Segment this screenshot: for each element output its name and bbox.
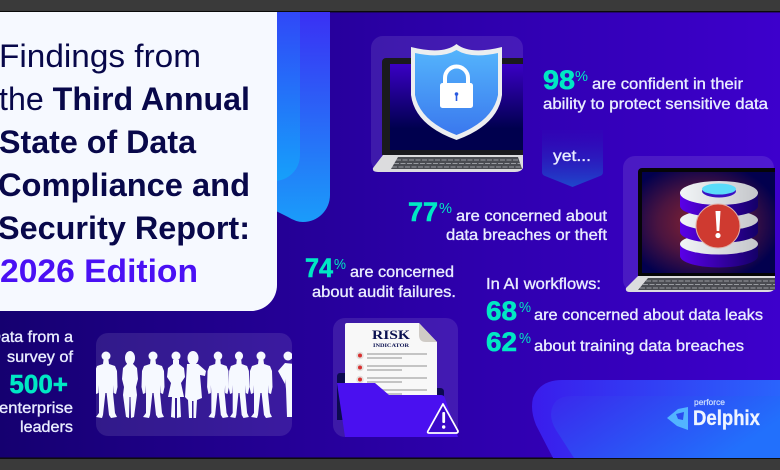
stat: 68%: are concerned about data leaks [534, 307, 763, 324]
top bar [0, 0, 780, 12]
stat: 77% [408, 197, 608, 244]
stat: 68%: % [519, 299, 531, 316]
stat: 77%: data breaches or theft [446, 227, 608, 244]
stat: 77%: are concerned about [456, 208, 608, 225]
title text: Findings from [0, 38, 201, 74]
stat: 98%: 98 [543, 65, 575, 95]
blue tab behind title panel [270, 12, 330, 222]
stat: 77%: % [439, 200, 452, 217]
callout: yet [542, 130, 603, 187]
icon: database with alert [680, 181, 758, 268]
survey text: enterprise [0, 400, 73, 417]
stat: 68% [486, 296, 763, 326]
stat: 74% [305, 253, 456, 301]
stat: 98% [543, 65, 768, 113]
title text: the Third Annual [0, 81, 250, 117]
survey text: leaders [20, 419, 73, 436]
stat: 62%: about training data breaches [534, 338, 744, 355]
icon: shield with lock [411, 44, 502, 140]
stats: AI workflows [486, 276, 763, 357]
stat: 62%: 62 [486, 327, 517, 357]
title text: 2026 Edition [0, 253, 198, 289]
logo: perforce Delphix: perforce [694, 398, 726, 407]
laptop [626, 168, 775, 292]
panel: laptop with shield [371, 36, 523, 172]
panel: people silhouettes [94, 333, 294, 436]
title text: Security Report: [0, 210, 250, 246]
folder front [337, 383, 458, 437]
stat: 74%: about audit failures. [312, 284, 456, 301]
stat: 62% [486, 327, 744, 357]
document: RISK [372, 327, 411, 342]
panel: laptop with database [623, 156, 775, 292]
callout: yet: yet... [553, 148, 591, 165]
bottom bar [0, 458, 780, 470]
stat: 98%: % [575, 68, 588, 85]
folder back [337, 373, 444, 420]
laptop [373, 58, 523, 172]
panel: logo area [532, 380, 780, 458]
stat: 74%: % [334, 256, 346, 273]
stat: 77%: 77 [408, 197, 438, 227]
stat: 98%: ability to protect sensitive data [543, 96, 768, 113]
stats: AI workflows: In AI workflows: [486, 276, 601, 293]
logo: perforce Delphix [667, 398, 760, 430]
title text: Compliance and [0, 167, 250, 203]
stat: 62%: % [519, 330, 531, 347]
survey text [0, 329, 74, 436]
title text [0, 38, 250, 289]
survey text: survey of [7, 349, 74, 366]
panel: risk indicator folder [333, 318, 458, 437]
survey text: 500+ [9, 369, 68, 399]
icon: warning triangle [428, 404, 458, 433]
stat: 74%: are concerned [350, 264, 454, 281]
title panel [0, 12, 277, 311]
stat: 74%: 74 [305, 253, 333, 283]
document: INDICATOR [373, 343, 410, 349]
title text: State of Data [0, 124, 196, 160]
logo: perforce Delphix: Delphix [693, 407, 760, 430]
stat: 98%: are confident in their [592, 76, 744, 93]
document [345, 323, 437, 400]
stat: 68%: 68 [486, 296, 517, 326]
